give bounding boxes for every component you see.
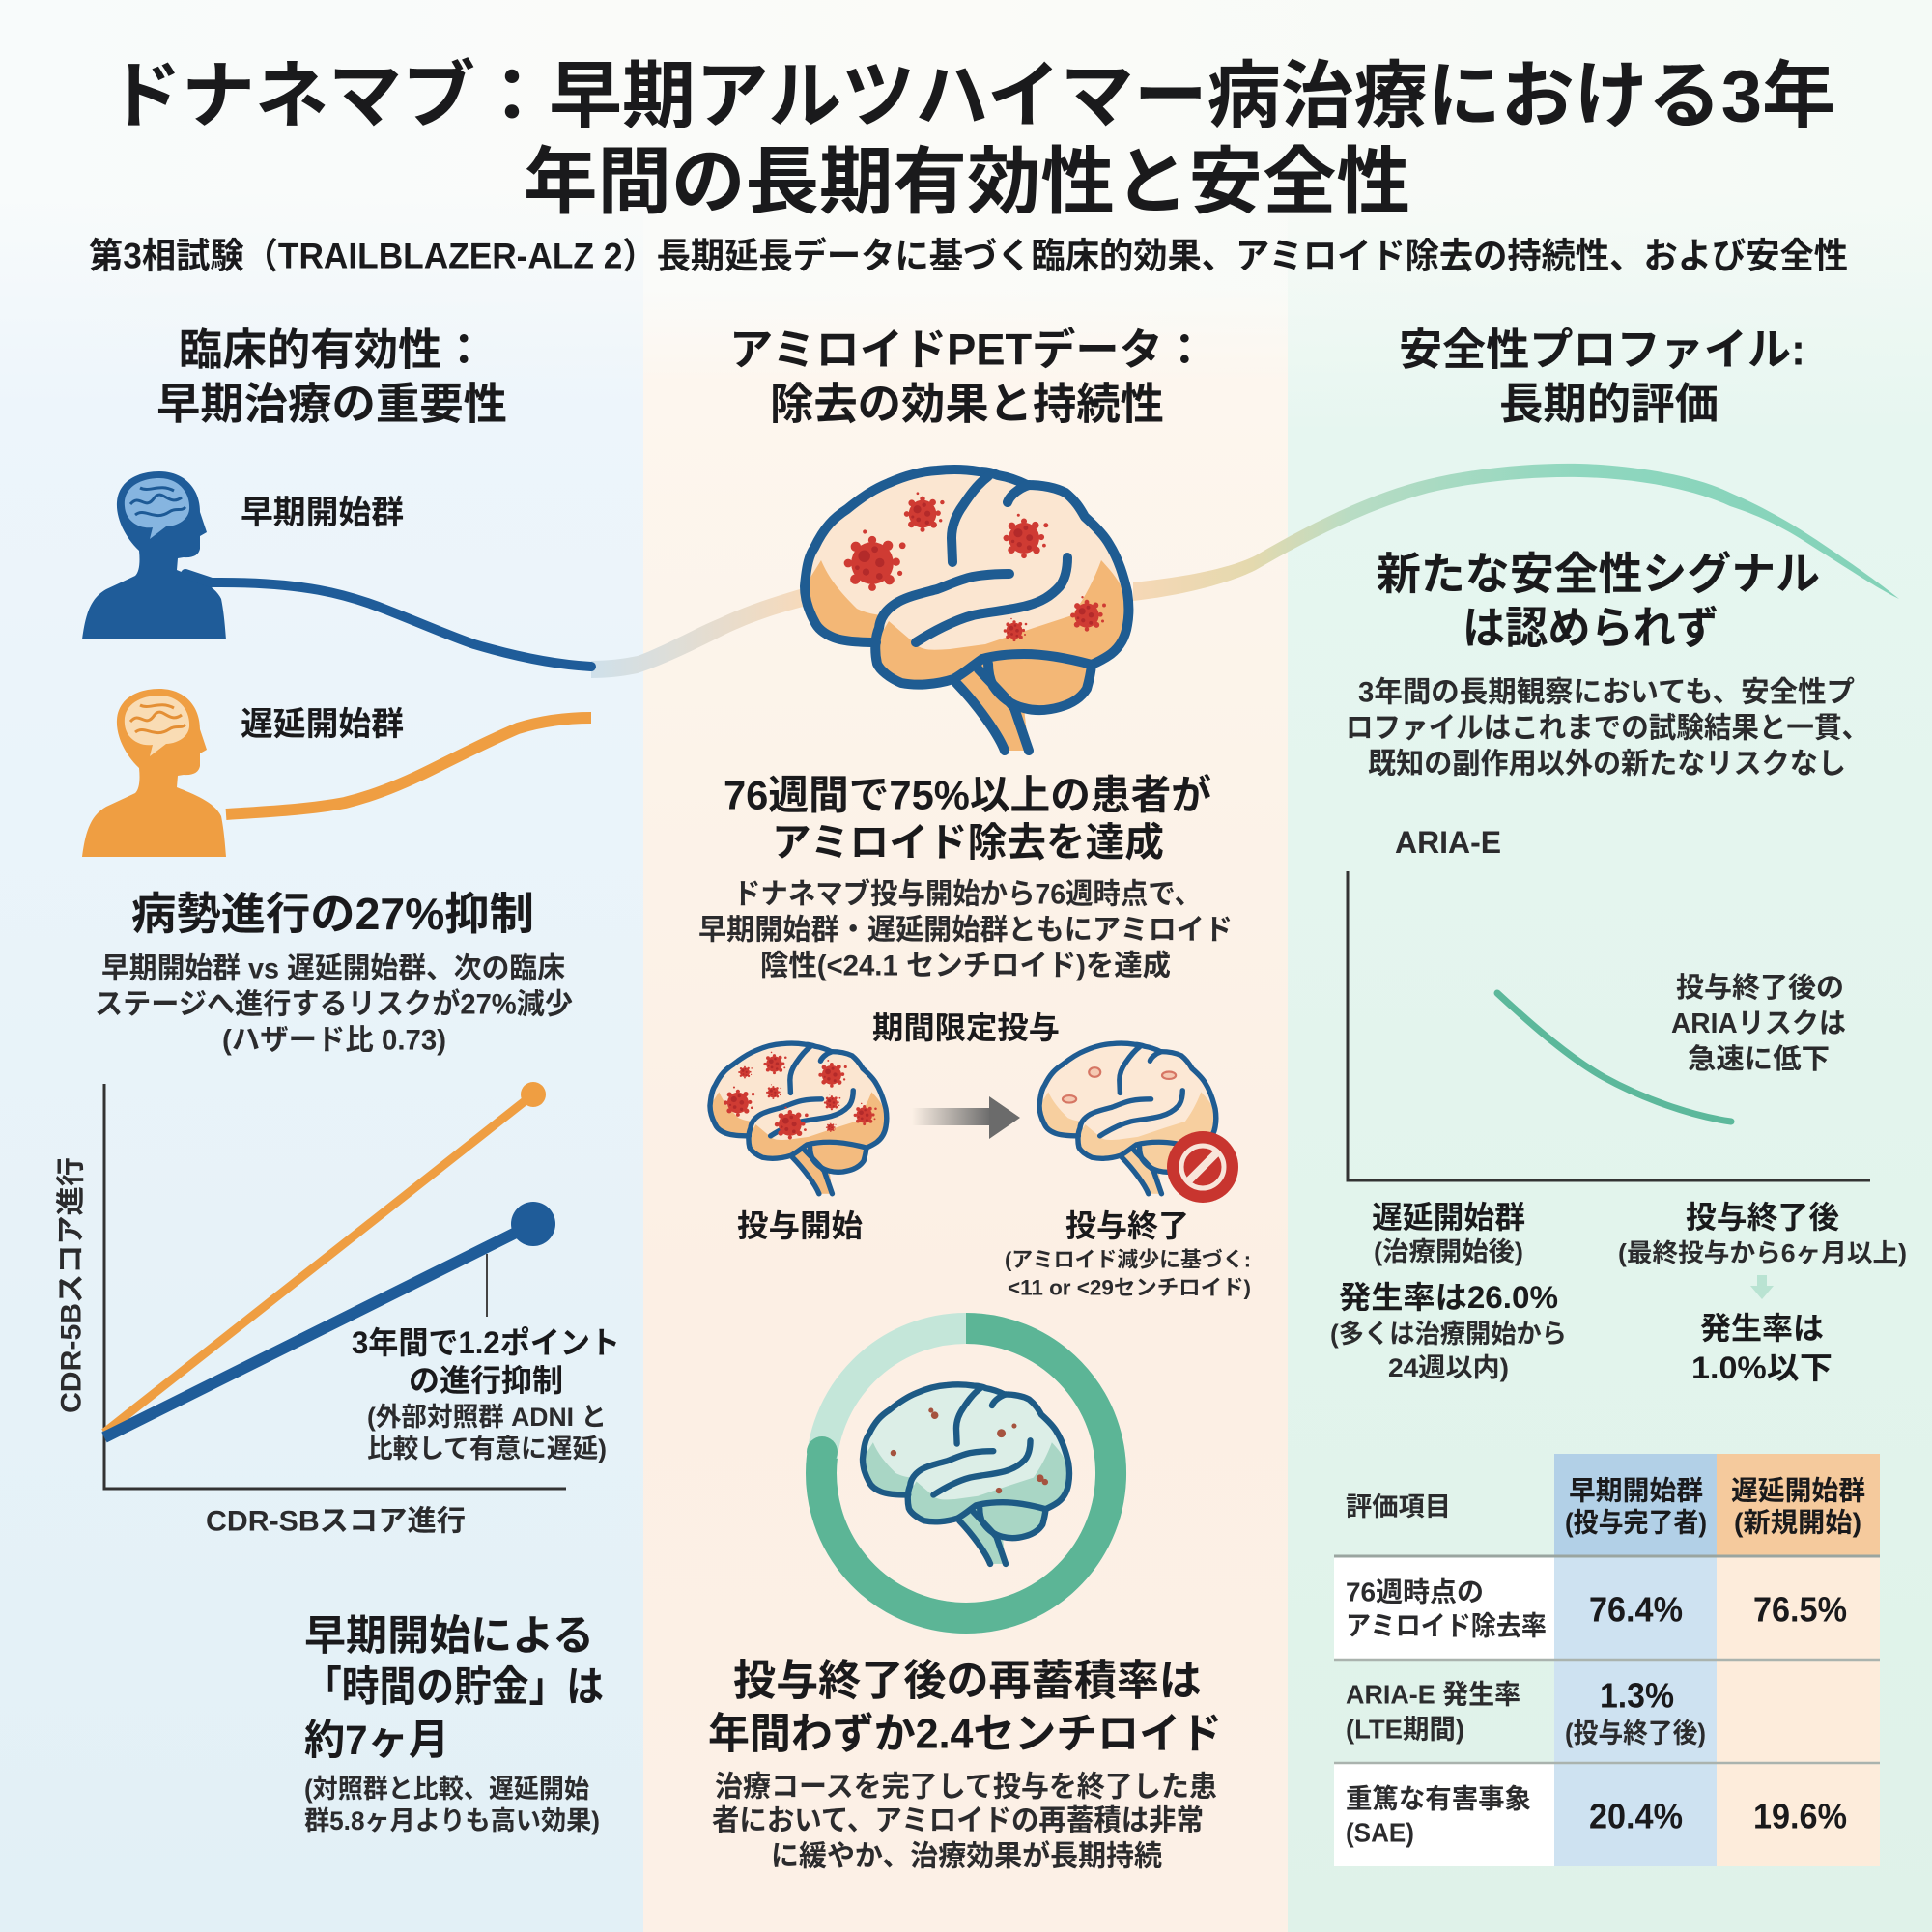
comparison table: (LTE期間) (1346, 1714, 1464, 1745)
chart annotation (352, 1325, 620, 1463)
stat: delayed group ARIA incidence: (多くは治療開始から (1330, 1320, 1567, 1349)
chart: ARIA-E (1348, 825, 1870, 1180)
chart: ARIA-E: 急速に低下 (1688, 1043, 1830, 1075)
chart annotation: 3年間で1.2ポイント (352, 1325, 620, 1360)
stat: delayed group ARIA incidence: 発生率は26.0% (1339, 1280, 1558, 1315)
stat: 75 percent clearance: ドナネマブ投与開始から76週時点で、 (733, 877, 1202, 910)
title: ドナネマブ：早期アルツハイマー病治療における3年 (108, 56, 1835, 137)
stat: 27 percent: ステージへ進行するリスクが27%減少 (95, 987, 573, 1020)
callout: time savings: 群5.8ヶ月よりも高い効果) (304, 1806, 600, 1835)
stat: no new safety signals: ロファイルはこれまでの試験結果と一貫、 (1346, 713, 1869, 744)
heading: clinical efficacy (156, 325, 507, 429)
callout: time savings (304, 1613, 604, 1835)
chart annotation: の進行抑制 (409, 1363, 563, 1398)
stat: 75 percent clearance: 早期開始群・遅延開始群ともにアミロイド (698, 914, 1233, 947)
label: end of dosing (1005, 1208, 1251, 1300)
stat: 75 percent clearance: 76週間で75%以上の患者が (724, 773, 1211, 817)
line chart: CDR-SB progression: CDR-SBスコア進行 (206, 1505, 466, 1538)
stat: 27 percent (95, 889, 573, 1057)
heading: safety profile: 長期的評価 (1499, 379, 1719, 429)
comparison table: 76週時点の (1346, 1577, 1484, 1607)
stat: 75 percent clearance: 陰性(<24.1 センチロイド)を達成 (760, 951, 1171, 981)
panel: clinical efficacy background (0, 193, 643, 1932)
title: 年間の長期有効性と安全性 (524, 141, 1410, 224)
stat: delayed group ARIA incidence (1330, 1200, 1567, 1382)
comparison table: (新規開始) (1734, 1507, 1861, 1538)
comparison table: アミロイド除去率 (1346, 1611, 1547, 1640)
chart: ARIA-E: ARIAリスクは (1671, 1009, 1846, 1039)
callout: time savings: (対照群と比較、遅延開始 (304, 1775, 589, 1804)
line chart: CDR-SB progression: CDR-5Bスコア進行 (56, 1157, 87, 1413)
stat: delayed group ARIA incidence: 24週以内) (1388, 1353, 1509, 1382)
stat: no new safety signals: 新たな安全性シグナル (1377, 549, 1820, 599)
label: early start group: 早期開始群 (241, 495, 404, 531)
comparison table: 1.3% (1600, 1675, 1674, 1716)
stat: no new safety signals: は認められず (1463, 603, 1719, 653)
comparison table: (投与完了者) (1565, 1507, 1707, 1538)
arrow (912, 1096, 1020, 1139)
icon: large brain with plaques (805, 469, 1128, 751)
title (108, 56, 1835, 224)
comparison table: 重篤な有害事象 (1346, 1783, 1531, 1814)
heading: clinical efficacy: 臨床的有効性： (179, 325, 486, 375)
stat: post dosing ARIA incidence: 1.0%以下 (1691, 1350, 1833, 1385)
stat: 75 percent clearance (698, 773, 1233, 981)
panel: amyloid PET background (643, 193, 1288, 1932)
icon: stop sign (1167, 1131, 1238, 1203)
stat: 27 percent: (ハザード比 0.73) (222, 1024, 446, 1057)
comparison table: 早期開始群 (1569, 1476, 1703, 1505)
comparison table: 19.6% (1753, 1797, 1847, 1835)
callout: time savings: 「時間の貯金」は (304, 1664, 604, 1711)
subtitle: 第3相試験（TRAILBLAZER-ALZ 2）長期延長データに基づく臨床的効果、アミロイド除去の持続性、および安全性 (89, 236, 1848, 276)
stat: post dosing ARIA incidence (1618, 1200, 1907, 1385)
callout: time savings: 約7ヶ月 (304, 1718, 449, 1764)
label: end of dosing: <11 or <29センチロイド) (1008, 1275, 1251, 1300)
icon: early group head (82, 471, 226, 639)
comparison table: 20.4% (1589, 1797, 1683, 1835)
comparison table: ARIA-E 発生率 (1346, 1679, 1520, 1710)
stat: reaccumulation rate (708, 1658, 1222, 1872)
chart: ARIA-E: 投与終了後の (1676, 972, 1844, 1004)
stat: reaccumulation rate: に緩やか、治療効果が長期持続 (771, 1839, 1162, 1872)
panel: amyloid PET (698, 325, 1251, 1872)
panel: safety profile (1330, 325, 1907, 1866)
delayed group line (226, 718, 591, 814)
comparison table: 76.5% (1753, 1590, 1847, 1629)
icon: delayed group head (82, 689, 226, 857)
chart annotation: 比較して有意に遅延) (367, 1435, 607, 1463)
stat: no new safety signals (1346, 549, 1869, 781)
icon: small down arrow (1750, 1275, 1774, 1299)
stat: no new safety signals: 3年間の長期観察においても、安全性プ (1358, 676, 1855, 709)
heading: limited duration dosing: 期間限定投与 (872, 1010, 1060, 1045)
heading: amyloid PET: アミロイドPETデータ： (729, 325, 1207, 375)
stat: post dosing ARIA incidence: 投与終了後 (1686, 1200, 1839, 1235)
chart: ARIA-E: ARIA-E (1395, 825, 1501, 860)
stat: delayed group ARIA incidence: 遅延開始群 (1372, 1200, 1525, 1235)
label: end of dosing: 投与終了 (1065, 1208, 1189, 1243)
stat: no new safety signals: 既知の副作用以外の新たなリスクなし (1368, 748, 1846, 781)
comparison table: (投与終了後) (1565, 1718, 1706, 1748)
comparison table: 遅延開始群 (1731, 1476, 1865, 1505)
panel: clinical efficacy (56, 325, 620, 1835)
stat: 75 percent clearance: アミロイド除去を達成 (772, 820, 1164, 865)
comparison table (1334, 1454, 1880, 1866)
icon: brain with low reaccumulation (863, 1384, 1069, 1564)
callout: time savings: 早期開始による (304, 1613, 594, 1660)
stat: 27 percent: 病勢進行の27%抑制 (131, 889, 534, 939)
icon: brain at end of dosing (1039, 1043, 1216, 1194)
chart annotation: (外部対照群 ADNI と (367, 1403, 607, 1432)
heading: safety profile: 安全性プロファイル: (1399, 325, 1805, 375)
heading: amyloid PET (729, 325, 1207, 429)
flowing wave connector (591, 464, 1899, 678)
stat: reaccumulation rate: 治療コースを完了して投与を終了した患 (715, 1772, 1217, 1803)
stat: post dosing ARIA incidence: 発生率は (1700, 1311, 1824, 1346)
early group line (185, 574, 591, 667)
heading: safety profile (1399, 325, 1805, 429)
stat: 27 percent: 早期開始群 vs 遅延開始群、次の臨床 (101, 952, 565, 985)
icon: brain at start of dosing (710, 1043, 887, 1194)
stat: reaccumulation rate: 投与終了後の再蓄積率は (733, 1658, 1202, 1704)
line chart: CDR-SB progression (56, 1082, 566, 1538)
label: start of dosing: 投与開始 (737, 1208, 863, 1243)
label: delayed start group: 遅延開始群 (241, 706, 404, 743)
stat: delayed group ARIA incidence: (治療開始後) (1374, 1237, 1523, 1266)
comparison table: 76.4% (1589, 1590, 1683, 1629)
stat: post dosing ARIA incidence: (最終投与から6ヶ月以上) (1618, 1238, 1907, 1267)
comparison table: (SAE) (1346, 1818, 1414, 1847)
donut ring (807, 1328, 1111, 1618)
heading: amyloid PET: 除去の効果と持続性 (770, 379, 1164, 429)
stat: reaccumulation rate: 者において、アミロイドの再蓄積は非常 (712, 1804, 1204, 1837)
panel: safety profile background (1288, 193, 1932, 1932)
stat: reaccumulation rate: 年間わずか2.4センチロイド (708, 1710, 1222, 1758)
label: end of dosing: (アミロイド減少に基づく: (1005, 1248, 1251, 1271)
comparison table: 評価項目 (1346, 1492, 1451, 1521)
heading: clinical efficacy: 早期治療の重要性 (156, 379, 507, 429)
